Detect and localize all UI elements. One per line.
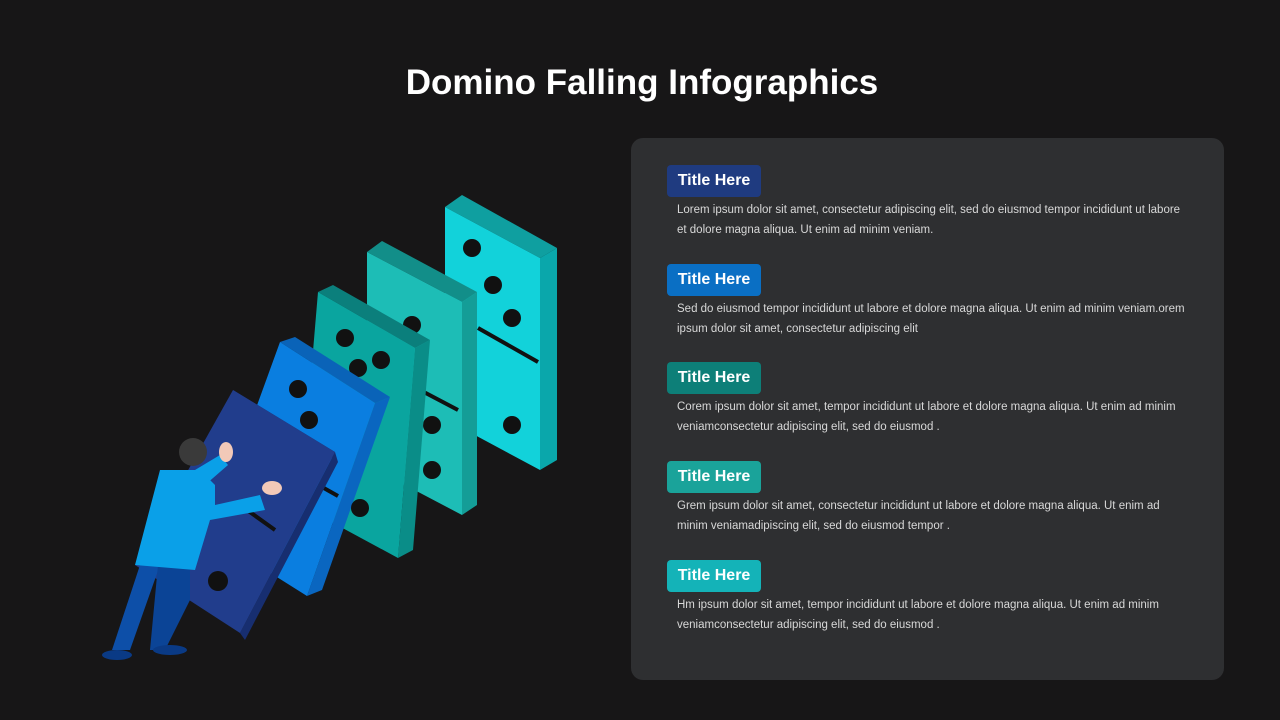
illustration: dominoes and man xyxy=(102,195,557,660)
item 2: Sed do eiusmod tempor incididunt ut labore et dolore magna aliqua. Ut enim ad minim veniam.orem ipsum dolor sit amet, consectetur adipiscing elit xyxy=(677,303,1185,334)
item 5 xyxy=(667,560,1159,630)
domino 4 xyxy=(367,241,477,515)
item 3: Title Here xyxy=(678,369,750,386)
domino 3 xyxy=(300,285,430,558)
item 1: Lorem ipsum dolor sit amet, consectetur adipiscing elit, sed do eiusmod tempor incididunt ut labore et dolore magna aliqua. Ut enim ad minim veniam. xyxy=(677,204,1180,236)
domino 2 xyxy=(210,337,390,596)
item 3 xyxy=(667,362,1176,432)
item 4: Grem ipsum dolor sit amet, consectetur incididunt ut labore et dolore magna aliqua. Ut enim ad minim veniamadipiscing elit, sed do eiusmod tempor . xyxy=(677,500,1160,532)
item 5: Title Here xyxy=(678,567,750,584)
man xyxy=(102,438,282,660)
domino 5 xyxy=(445,195,557,470)
item 4: Title Here xyxy=(678,468,750,485)
item 3: Corem ipsum dolor sit amet, tempor incididunt ut labore et dolore magna aliqua. Ut enim ad minim veniamconsectetur adipiscing elit, sed do eiusmod . xyxy=(677,401,1176,432)
item 2 xyxy=(667,264,1185,334)
domino 1 xyxy=(135,390,338,640)
item 4 xyxy=(667,461,1160,532)
item 2: Title Here xyxy=(678,271,750,288)
title: Domino Falling Infographics xyxy=(406,63,878,102)
item 5: Hm ipsum dolor sit amet, tempor incididunt ut labore et dolore magna aliqua. Ut enim ad minim veniamconsectetur adipiscing elit, sed do eiusmod . xyxy=(677,599,1159,630)
item 1: Title Here xyxy=(678,172,750,189)
item 1 xyxy=(667,165,1180,236)
panel: text items xyxy=(631,138,1224,680)
